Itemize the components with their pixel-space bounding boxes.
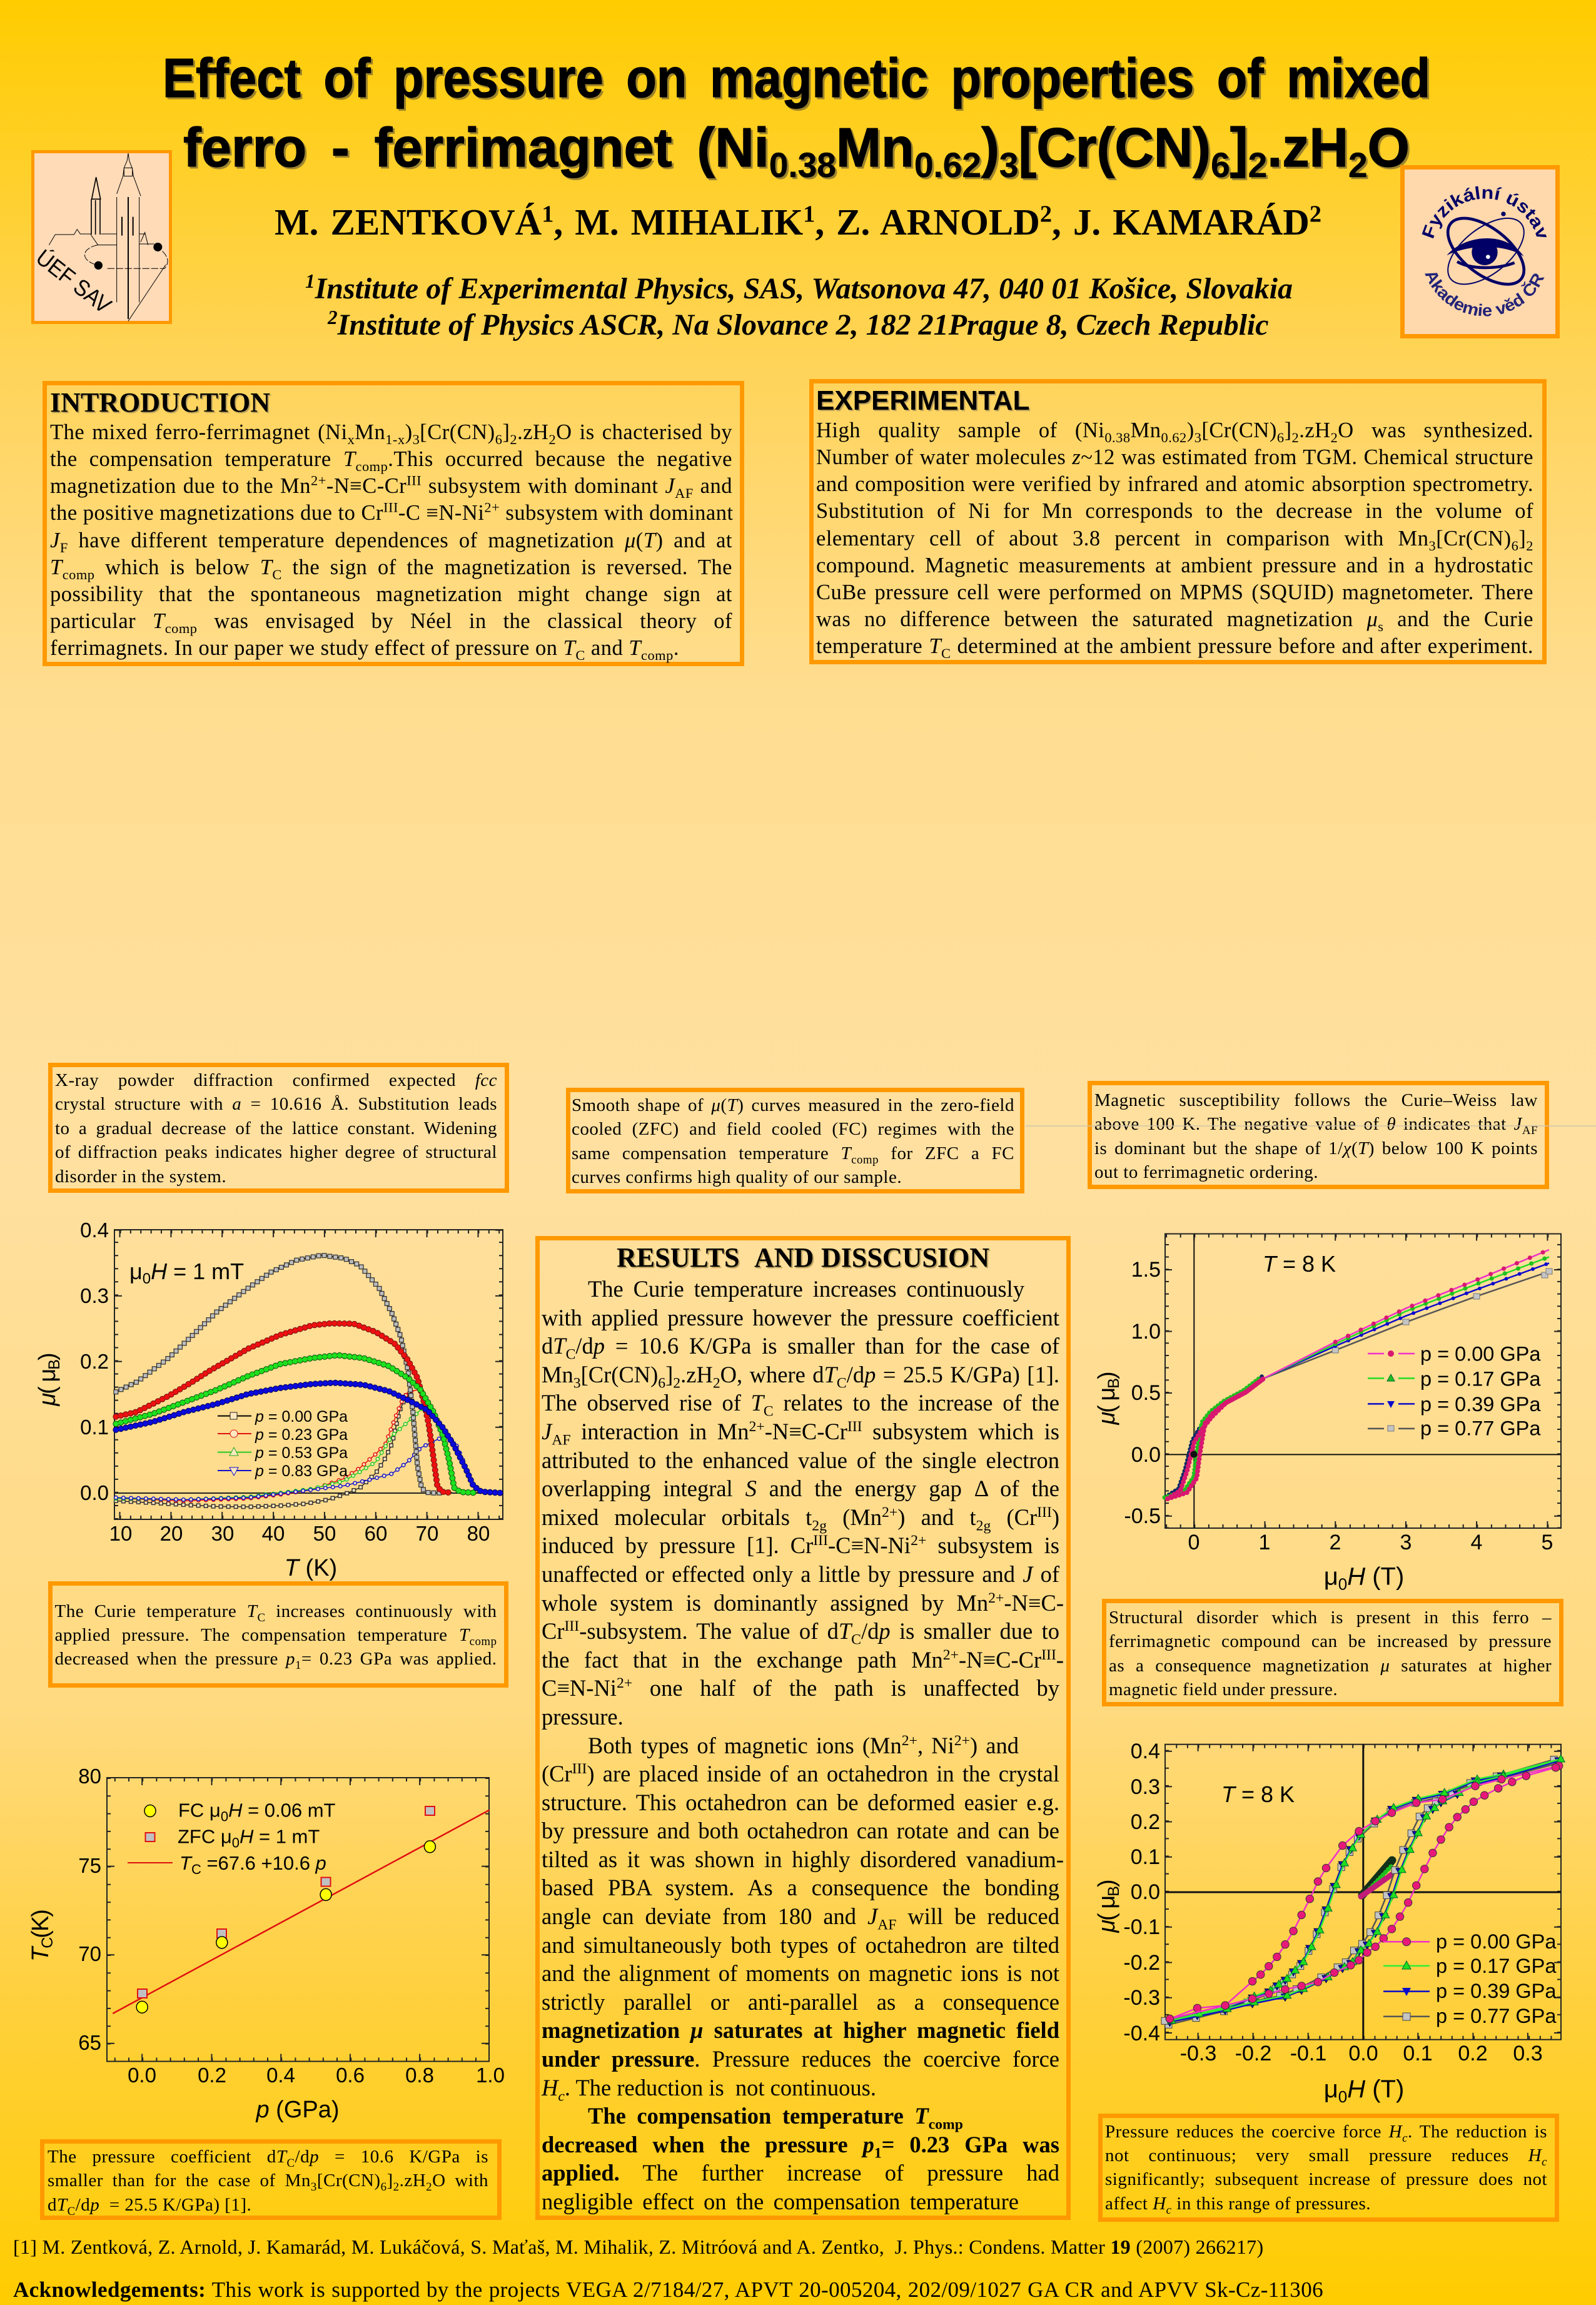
text: introduction body: the positive magnetizations due to CrIII-C ≡N-Ni2+ subsystem with dominant bbox=[50, 500, 734, 525]
axis title: field: (T) bbox=[1372, 1563, 1404, 1591]
series markers high field bbox=[1335, 1250, 1549, 1346]
text: susceptibility note: is dominant but the shape of 1/χ(T) below 100 K points bbox=[1094, 1138, 1538, 1158]
text: structural disorder note bbox=[1109, 1608, 1552, 1700]
x tick labels: 4 bbox=[1471, 1531, 1482, 1554]
legend: p = 0.53 GPa bbox=[255, 1444, 348, 1462]
legend: p = 0.39 GPa bbox=[1436, 1980, 1557, 2002]
series: p = 0.77 bbox=[1264, 1269, 1552, 1379]
axis title: temperature: T (K) bbox=[285, 1555, 337, 1581]
y tick labels bbox=[1123, 1740, 1160, 2045]
axis title: field: μ bbox=[1324, 1563, 1338, 1591]
x tick labels: 0.1 bbox=[1403, 2042, 1433, 2065]
axis title: moment: B bbox=[1105, 1379, 1123, 1389]
x tick labels: -0.3 bbox=[1180, 2042, 1216, 2065]
text: structural disorder note: ferrimagnetic compound can be increased by pressure bbox=[1109, 1631, 1552, 1651]
axis tick labels: 0.4 bbox=[80, 1218, 109, 1242]
y tick labels: 80 bbox=[78, 1765, 101, 1788]
heading: introduction: INTRODUCTION bbox=[50, 387, 270, 418]
annotation: field: μ bbox=[129, 1259, 143, 1284]
legend: p = 0.77 GPa bbox=[1436, 2005, 1557, 2027]
text: results body: pressure. bbox=[542, 1704, 624, 1730]
title: 3 bbox=[999, 145, 1019, 185]
y tick labels: -0.4 bbox=[1123, 2022, 1160, 2045]
legend: p = 0.17 GPa bbox=[1420, 1368, 1541, 1391]
legend: ZFC μ bbox=[178, 1826, 232, 1848]
x tick labels bbox=[1180, 2042, 1543, 2065]
series: p = 0.17 bbox=[1264, 1257, 1549, 1379]
annotation: field: 0 bbox=[143, 1270, 151, 1287]
text: experimental body: and composition were verified by infrared and atomic absorption spectrometry. bbox=[816, 472, 1533, 496]
text: results body: and the alignment of moments on magnetic ions is not bbox=[542, 1960, 1059, 1986]
title bbox=[163, 47, 1430, 185]
text: coercive force note: affect Hc in this range of pressures. bbox=[1105, 2194, 1371, 2216]
legend: p bbox=[315, 1852, 326, 1874]
legend bbox=[218, 1408, 348, 1480]
text: experimental body: High quality sample of (Ni0.38Mn0.62)3[Cr(CN)6]2.zH2O was synthesized. bbox=[816, 418, 1533, 445]
text: x-ray note: crystal structure with a = 10.616 Å. Substitution leads bbox=[55, 1094, 497, 1114]
axis title: moment: ) bbox=[1094, 1880, 1120, 1887]
x tick labels: 5 bbox=[1542, 1531, 1553, 1554]
text: results body: applied. The further increase of pressure had bbox=[542, 2160, 1059, 2186]
series: p = 0.00 bbox=[1169, 1766, 1559, 2019]
legend: =67.6 +10.6 bbox=[201, 1852, 316, 1874]
axis title: pressure: p (GPa) bbox=[255, 2097, 340, 2123]
y tick labels: -0.1 bbox=[1123, 1915, 1160, 1939]
y tick labels: 0.2 bbox=[1131, 1810, 1160, 1834]
axis title: moment: μ( μ bbox=[34, 1370, 61, 1406]
text: results body: CrIII-subsystem. The value of dTC/dp is smaller due to bbox=[542, 1618, 1059, 1648]
legend: = 1 mT bbox=[259, 1826, 320, 1848]
text: results body: the fact that in the exchange path Mn2+-N≡C-CrIII- bbox=[542, 1647, 1064, 1673]
text: pressure coefficient note bbox=[48, 2147, 488, 2218]
chart: magnetization vs field up to 5 T bbox=[1094, 1234, 1561, 1594]
text: results body: (CrIII) are placed inside of an octahedron in the crystal bbox=[542, 1761, 1059, 1786]
text: smooth shape note: Smooth shape of μ(T) curves measured in the zero-field bbox=[572, 1095, 1014, 1115]
annotation: field: = 1 mT bbox=[173, 1259, 244, 1284]
text: smooth shape note bbox=[572, 1095, 1014, 1187]
text: results body: strictly parallel or anti-parallel as a consequence bbox=[542, 1989, 1059, 2015]
icon: logo UEF SAV: ÚEF SAV bbox=[31, 245, 116, 318]
title: 2 bbox=[1348, 145, 1368, 185]
panel: magnetic susceptibility note bbox=[1088, 1081, 1549, 1189]
text: results body: structure. This octahedron can be deformed easier e.g. bbox=[542, 1790, 1059, 1815]
text: results body: Hc. The reduction is not continuous. bbox=[542, 2075, 876, 2104]
legend: p = 0.17 GPa bbox=[1436, 1955, 1557, 1977]
axis title: field: 0 bbox=[1338, 2087, 1347, 2106]
affiliation 1: 1Institute of Experimental Physics, SAS, Watsonova 47, 040 01 Košice, Slovakia bbox=[305, 270, 1293, 305]
y tick labels bbox=[78, 1765, 101, 2054]
text: pressure coefficient note: The pressure coefficient dTC/dp = 10.6 K/GPa is bbox=[48, 2147, 488, 2170]
text: results body: tilted as it was shown in highly disordered vanadium- bbox=[542, 1847, 1064, 1872]
title: 2 bbox=[1248, 145, 1267, 185]
x tick labels: 0.8 bbox=[405, 2064, 434, 2087]
legend: H bbox=[228, 1799, 243, 1821]
text: structural disorder note: magnetic field under pressure. bbox=[1109, 1679, 1338, 1700]
x tick labels: 50 bbox=[313, 1522, 336, 1545]
legend: FC μ bbox=[178, 1799, 221, 1821]
text: results body: The Curie temperature increases continuously bbox=[588, 1276, 1024, 1302]
authors: M. ZENTKOVÁ1, M. MIHALIK1, Z. ARNOLD2, J. KAMARÁD2 bbox=[275, 201, 1321, 243]
text: smooth shape note: same compensation temperature Tcomp for ZFC a FC bbox=[572, 1143, 1014, 1167]
x tick labels: 0.0 bbox=[1348, 2042, 1378, 2065]
y tick labels: 0.3 bbox=[1131, 1775, 1160, 1799]
icon: logo Fyzikalni ustav: Akademie věd ČR bbox=[1425, 273, 1545, 317]
title: 6 bbox=[1211, 145, 1230, 185]
heading: experimental: EXPERIMENTAL bbox=[816, 385, 1029, 416]
text: coercive force note bbox=[1105, 2122, 1547, 2216]
y tick labels: -0.2 bbox=[1123, 1951, 1160, 1975]
text: results body: The compensation temperature Tcomp bbox=[588, 2103, 963, 2133]
y tick labels: 65 bbox=[78, 2031, 101, 2054]
text: results body: Mn3[Cr(CN)6]2.zH2O, where dTC/dp = 25.5 K/GPa) [1]. bbox=[542, 1362, 1059, 1391]
x tick labels: -0.2 bbox=[1235, 2042, 1271, 2065]
icon: logo Fyzikalni ustav: Fyzikální ústav bbox=[1422, 186, 1547, 239]
x tick labels: 1.0 bbox=[476, 2064, 505, 2087]
legend: p = 0.00 GPa bbox=[255, 1408, 348, 1426]
text: results body: with applied pressure however the pressure coefficient bbox=[542, 1305, 1059, 1330]
y tick labels: 75 bbox=[78, 1854, 101, 1877]
text: coercive force note: not continuous; very small pressure reduces Hc bbox=[1105, 2145, 1547, 2169]
axis title: field: H bbox=[1347, 2075, 1365, 2103]
x tick labels bbox=[128, 2064, 505, 2087]
y tick labels: 70 bbox=[78, 1942, 101, 1965]
legend: 0 bbox=[221, 1809, 228, 1824]
faint rule behind right column bbox=[1026, 1125, 1596, 1127]
fit line bbox=[113, 1810, 489, 2014]
axis tick labels bbox=[80, 1218, 109, 1504]
axis tick labels: 0.3 bbox=[80, 1284, 109, 1307]
text: introduction body: particular Tcomp was envisaged by Néel in the classical theory of bbox=[50, 609, 732, 636]
axis title: field: 0 bbox=[1338, 1575, 1347, 1594]
title: ] bbox=[1230, 116, 1248, 178]
panel: pressure coefficient note bbox=[40, 2139, 502, 2220]
text: experimental body bbox=[816, 418, 1533, 661]
text: results body: and simultaneously both types of octahedron are tilted bbox=[542, 1932, 1059, 1958]
text: structural disorder note: as a consequence magnetization μ saturates at higher bbox=[1109, 1656, 1552, 1676]
x tick labels: -0.1 bbox=[1290, 2042, 1326, 2065]
text: experimental body: compound. Magnetic measurements at ambient pressure and in a hydrostatic bbox=[816, 554, 1533, 577]
acknowledgements: Acknowledgements: This work is supported by the projects VEGA 2/7184/27, APVT 20-005204, 202/09/1027 GA CR and APVV Sk-Cz-11306 bbox=[13, 2277, 1323, 2302]
legend bbox=[128, 1799, 336, 1877]
text: pressure coefficient note: dTC/dp = 25.5 K/GPa) [1]. bbox=[48, 2195, 251, 2218]
title: O bbox=[1368, 116, 1410, 178]
text: results body: JAF interaction in Mn2+-N≡C-CrIII subsystem which is bbox=[542, 1419, 1059, 1448]
series: p = 0.77 bbox=[1164, 1760, 1558, 2025]
legend: p = 0.77 GPa bbox=[1420, 1417, 1541, 1440]
panel: introduction bbox=[43, 381, 744, 666]
annotation: temperature: T = 8 K bbox=[1263, 1251, 1336, 1277]
text: experimental body: Substitution of Ni for Mn corresponds to the decrease in the volume of bbox=[816, 499, 1533, 523]
legend: p = 0.83 GPa bbox=[255, 1462, 348, 1480]
axis title: moment: ) bbox=[1094, 1372, 1120, 1379]
x tick labels: 10 bbox=[109, 1522, 132, 1545]
axis title: field: μ bbox=[1324, 2075, 1338, 2103]
series: initial magnetization curves bbox=[1361, 1860, 1392, 1897]
x tick labels: 2 bbox=[1330, 1531, 1341, 1554]
text: results body: attributed to the enhanced value of the single electron bbox=[542, 1447, 1059, 1473]
title: ferro - ferrimagnet (Ni bbox=[183, 116, 779, 178]
text: results body: by pressure and both octahedron can rotate and can be bbox=[542, 1818, 1059, 1843]
panel: curie temperature note bbox=[48, 1581, 508, 1688]
text: results body: overlapping integral S and the energy gap Δ of the bbox=[542, 1476, 1059, 1501]
chart: magnetization vs temperature bbox=[34, 1218, 503, 1581]
x tick labels: 0.6 bbox=[336, 2064, 365, 2087]
heading: results and discussion: RESULTS AND DISSCUSION bbox=[617, 1242, 989, 1273]
text: x-ray note: X-ray powder diffraction confirmed expected fcc bbox=[55, 1070, 497, 1090]
x tick labels bbox=[1188, 1531, 1553, 1554]
text: results body: The observed rise of TC relates to the increase of the bbox=[542, 1390, 1059, 1420]
y tick labels: -0.5 bbox=[1124, 1504, 1161, 1528]
legend: = 0.06 mT bbox=[248, 1799, 335, 1821]
text: x-ray note: disorder in the system. bbox=[55, 1167, 226, 1187]
panel: experimental bbox=[809, 379, 1547, 664]
y tick labels: 1.5 bbox=[1131, 1258, 1161, 1282]
axis title: moment: μ( μ bbox=[1094, 1897, 1120, 1933]
x tick labels: 3 bbox=[1400, 1531, 1412, 1554]
text: results body: magnetization μ saturates at higher magnetic field bbox=[542, 2017, 1059, 2043]
title: .zH bbox=[1267, 116, 1348, 178]
axis title: field: H bbox=[1347, 1563, 1365, 1591]
x tick labels: 60 bbox=[365, 1522, 387, 1545]
text: susceptibility note: out to ferrimagnetic ordering. bbox=[1094, 1162, 1318, 1182]
text: introduction body: Tcomp which is below TC the sign of the magnetization is reversed. The bbox=[50, 555, 732, 582]
x tick labels: 30 bbox=[211, 1522, 234, 1545]
series: p = 0.17 bbox=[1172, 1759, 1561, 2020]
text: x-ray note: of diffraction peaks indicates higher degree of structural bbox=[55, 1142, 497, 1162]
legend: H bbox=[240, 1826, 254, 1848]
axis title: moment: μ( μ bbox=[1094, 1389, 1120, 1425]
title: 0.38 bbox=[769, 145, 836, 185]
text: experimental body: CuBe pressure cell were performed on MPMS (SQUID) magnetometer. There bbox=[816, 580, 1533, 604]
y tick labels: 0.1 bbox=[1131, 1845, 1160, 1869]
series: p = 0.00 bbox=[1264, 1250, 1549, 1379]
text: introduction body bbox=[50, 420, 734, 663]
x tick labels: 70 bbox=[416, 1522, 438, 1545]
series: p = 0.39 bbox=[1264, 1263, 1549, 1379]
text: susceptibility note: above 100 K. The negative value of θ indicates that JAF bbox=[1094, 1114, 1538, 1137]
axis title: Tc: (K) bbox=[28, 1910, 54, 1938]
title: Mn bbox=[836, 116, 914, 178]
series: FC curves bbox=[116, 1255, 500, 1493]
text: results body: Both types of magnetic ions (Mn2+, Ni2+) and bbox=[588, 1732, 1019, 1758]
legend: p = 0.39 GPa bbox=[1420, 1393, 1541, 1416]
text: results body: based PBA system. As a consequence the bonding bbox=[542, 1875, 1059, 1900]
chart: hysteresis loops at low field bbox=[1094, 1740, 1561, 2106]
title: ) bbox=[981, 116, 999, 178]
legend bbox=[1368, 1342, 1541, 1440]
legend: p = 0.00 GPa bbox=[1436, 1930, 1557, 1953]
x tick labels: 0.2 bbox=[1458, 2042, 1488, 2065]
text: results body: decreased when the pressure p1= 0.23 GPa was bbox=[542, 2132, 1059, 2161]
y tick labels: 0.4 bbox=[1131, 1740, 1160, 1763]
text: introduction body: the compensation temperature Tcomp.This occurred because the negative bbox=[50, 447, 732, 474]
text: results body: whole system is dominantly assigned by Mn2+-N≡C- bbox=[542, 1589, 1064, 1616]
annotation: temperature: T = 8 K bbox=[1221, 1781, 1295, 1807]
panel: x-ray diffraction note bbox=[48, 1063, 509, 1193]
x tick labels: 80 bbox=[467, 1522, 490, 1545]
legend: p = 0.00 GPa bbox=[1420, 1342, 1541, 1365]
affiliation 2: 2Institute of Physics ASCR, Na Slovance 2, 182 21Prague 8, Czech Republic bbox=[328, 306, 1269, 342]
title: 0.62 bbox=[914, 145, 981, 185]
axis title: moment: B bbox=[46, 1360, 63, 1370]
chart: Curie temperature vs pressure bbox=[28, 1765, 505, 2123]
text: curie temperature note bbox=[55, 1601, 497, 1672]
text: results body: angle can deviate from 180 and JAF will be reduced bbox=[542, 1903, 1059, 1933]
legend: p = 0.23 GPa bbox=[255, 1426, 348, 1444]
y tick labels: 0.0 bbox=[1131, 1880, 1160, 1904]
text: experimental body: Number of water molecules z~12 was estimated from TGM. Chemical structure bbox=[816, 445, 1533, 469]
axis title: field: (T) bbox=[1372, 2075, 1404, 2103]
x tick labels: 0.0 bbox=[128, 2064, 156, 2087]
text: introduction body: ferrimagnets. In our paper we study effect of pressure on TC and Tcomp. bbox=[50, 636, 679, 663]
y tick labels: 0.5 bbox=[1131, 1381, 1161, 1405]
text: experimental body: was no difference between the saturated magnetization μs and the Curie bbox=[816, 607, 1533, 634]
text: experimental body: elementary cell of about 3.8 percent in comparison with Mn3[Cr(CN)6]2 bbox=[816, 527, 1533, 553]
text: results body: mixed molecular orbitals t2g (Mn2+) and t2g (CrIII) bbox=[542, 1504, 1059, 1534]
text: smooth shape note: curves confirms high quality of our sample. bbox=[572, 1167, 902, 1187]
text: introduction body: possibility that the spontaneous magnetization might change sign at bbox=[50, 582, 732, 606]
text: pressure coefficient note: smaller than for the case of Mn3[Cr(CN)6]2.zH2O with bbox=[48, 2171, 488, 2194]
series: ZFC curves bbox=[116, 1390, 465, 1507]
text: coercive force note: significantly; subsequent increase of pressure does not bbox=[1105, 2169, 1547, 2189]
annotation: field: H bbox=[151, 1259, 168, 1284]
text: susceptibility note bbox=[1094, 1090, 1538, 1182]
panel: results and discussion bbox=[535, 1236, 1071, 2220]
x tick labels: 20 bbox=[160, 1522, 183, 1545]
panel: coercive force note bbox=[1098, 2114, 1559, 2222]
text: results body: C≡N-Ni2+ one half of the path is unaffected by bbox=[542, 1675, 1059, 1701]
x tick labels: 40 bbox=[262, 1522, 285, 1545]
text: introduction body: JF have different temperature dependences of magnetization μ(T) and at bbox=[50, 529, 732, 555]
text: coercive force note: Pressure reduces the coercive force Hc. The reduction is bbox=[1105, 2122, 1547, 2144]
legend: C bbox=[191, 1862, 201, 1877]
text: experimental body: temperature TC determined at the ambient pressure before and after experiment. bbox=[816, 634, 1533, 661]
text: results body: unaffected or effected only a little by pressure and J of bbox=[542, 1561, 1059, 1587]
reference: [1] M. Zentková, Z. Arnold, J. Kamarád, M. Lukáčová, S. Maťaš, M. Mihalik, Z. Mitróová and A. Zentko, J. Phys.: Condens. Matter 19 (2007) 266217) bbox=[13, 2236, 1263, 2258]
text: introduction body: The mixed ferro-ferrimagnet (NixMn1-x)3[Cr(CN)6]2.zH2O is chacterised by bbox=[50, 420, 732, 447]
title: Effect of pressure on magnetic properties of mixed bbox=[163, 47, 1430, 109]
x tick labels: 0.2 bbox=[198, 2064, 226, 2087]
x tick labels: 0.3 bbox=[1513, 2042, 1543, 2065]
x tick labels bbox=[109, 1522, 490, 1545]
axis title: moment: ) bbox=[34, 1354, 61, 1360]
legend bbox=[1383, 1930, 1557, 2027]
text: introduction body: magnetization due to the Mn2+-N≡C-CrIII subsystem with dominant JAF and bbox=[50, 473, 732, 501]
icon: logo UEF SAV bbox=[31, 151, 171, 323]
title: [Cr(CN) bbox=[1019, 116, 1211, 178]
text: results body: negligible effect on the compensation temperature bbox=[542, 2189, 1019, 2214]
series: p = 0.39 bbox=[1169, 1761, 1559, 2022]
text: results body: induced by pressure [1]. CrIII-C≡N-Ni2+ subsystem is bbox=[542, 1532, 1059, 1558]
y tick labels bbox=[1124, 1258, 1161, 1528]
axis title: Tc: T bbox=[28, 1945, 54, 1962]
y tick labels: 1.0 bbox=[1131, 1320, 1161, 1344]
text: curie temperature note: The Curie temperature TC increases continuously with bbox=[55, 1601, 497, 1624]
data: FC points bbox=[136, 1841, 435, 2013]
text: x-ray note: to a gradual decrease of the lattice constant. Widening bbox=[55, 1118, 497, 1138]
x tick labels: 1 bbox=[1259, 1531, 1270, 1554]
text: results body: under pressure. Pressure reduces the coercive force bbox=[542, 2046, 1059, 2072]
series: hysteresis loop near origin bbox=[1164, 1376, 1264, 1499]
text: smooth shape note: cooled (ZFC) and field cooled (FC) regimes with the bbox=[572, 1119, 1014, 1139]
x tick labels: 0 bbox=[1188, 1531, 1200, 1554]
axis tick labels: 0.1 bbox=[80, 1416, 109, 1439]
text: curie temperature note: applied pressure. The compensation temperature Tcomp bbox=[55, 1625, 497, 1648]
text: curie temperature note: decreased when the pressure p1= 0.23 GPa was applied. bbox=[55, 1649, 497, 1672]
x tick labels: 0.4 bbox=[266, 2064, 295, 2087]
y tick labels: -0.3 bbox=[1123, 1986, 1160, 2010]
panel: structural disorder note bbox=[1102, 1599, 1563, 1706]
text: structural disorder note: Structural disorder which is present in this ferro – bbox=[1109, 1608, 1552, 1628]
text: x-ray note bbox=[55, 1070, 497, 1187]
axis title: moment: B bbox=[1105, 1887, 1123, 1897]
panel: smooth shape note bbox=[566, 1088, 1024, 1193]
legend: T bbox=[179, 1852, 193, 1874]
axis title: Tc: C bbox=[39, 1937, 56, 1948]
axis tick labels: 0.0 bbox=[80, 1481, 109, 1504]
axis tick labels: 0.2 bbox=[80, 1350, 109, 1373]
icon: logo Fyzikalni ustav bbox=[1400, 165, 1560, 338]
text: results body bbox=[542, 1276, 1064, 2214]
text: results body: dTC/dp = 10.6 K/GPa is smaller than for the case of bbox=[542, 1333, 1059, 1362]
y tick labels: 0.0 bbox=[1131, 1443, 1161, 1467]
legend: 0 bbox=[232, 1835, 240, 1851]
data: ZFC points bbox=[138, 1806, 435, 1998]
text: susceptibility note: Magnetic susceptibility follows the Curie–Weiss law bbox=[1094, 1090, 1538, 1110]
